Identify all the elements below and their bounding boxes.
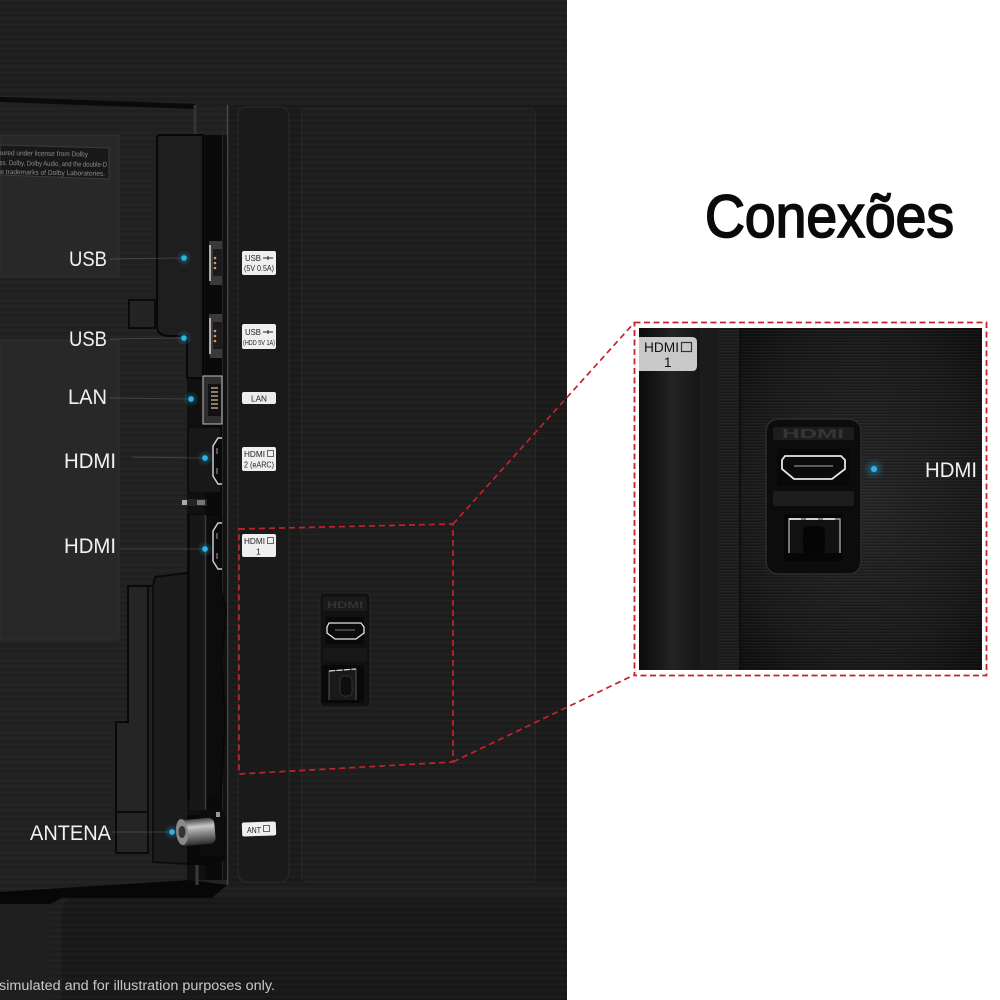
port: antenna connector	[175, 810, 224, 856]
lower cover	[62, 898, 567, 1000]
inset hdmi label: HDMI	[925, 459, 977, 482]
dolby notice plate: re trademarks of Dolby Laboratories.	[0, 169, 105, 178]
tv back panel	[0, 0, 567, 1000]
port tag: ant: ANT	[247, 825, 261, 835]
terminal column	[187, 105, 227, 885]
inset hdmi port	[782, 456, 845, 479]
label: hdmi 1: HDMI	[64, 535, 116, 558]
recessed terminal area	[0, 102, 227, 892]
port: hdmi 2	[213, 438, 222, 484]
inset hdmi tag	[639, 337, 697, 371]
inset left strip	[639, 328, 700, 670]
inset hdmi tag: HDMI	[644, 340, 679, 355]
port: hdmi 1	[213, 523, 222, 569]
inset marker	[863, 458, 885, 480]
inset textured surface	[741, 328, 982, 670]
port: usb 2	[209, 314, 222, 358]
port tag: hdmi 2	[242, 447, 276, 471]
port tag: hdmi 1: 1	[256, 546, 261, 556]
blue dot markers	[164, 250, 213, 840]
port tag: usb hdd: (HDD 5V 1A)	[243, 338, 275, 347]
label: lan: LAN	[68, 386, 107, 409]
hdmi door 1	[188, 515, 226, 810]
white side panel	[567, 0, 1000, 1000]
port tag: ant	[242, 821, 276, 837]
port: lan	[203, 376, 222, 424]
port tag: hdmi 2: 2 (eARC)	[244, 460, 274, 470]
dolby notice plate: ies. Dolby, Dolby Audio, and the double-D	[0, 160, 107, 169]
dolby notice plate: oured under license from Dolby	[0, 150, 89, 159]
label: usb 1: USB	[69, 248, 107, 271]
inset port housing: HDMI	[782, 426, 844, 441]
port tag: hdmi 2: HDMI	[244, 449, 265, 459]
inset hdmi tag: 1	[664, 355, 672, 370]
antenna recess	[187, 815, 225, 865]
leader lines	[110, 258, 201, 832]
rating panel lower	[0, 340, 119, 640]
port tag: usb hdd: USB	[245, 327, 261, 337]
port tag: usb hdd	[242, 324, 276, 349]
title: Conexões	[705, 183, 954, 250]
dolby notice plate	[0, 145, 109, 179]
blank cover panel	[302, 108, 536, 882]
small port housing: HDMI	[327, 600, 363, 610]
port tag: lan: LAN	[251, 394, 267, 404]
hinge	[181, 499, 207, 506]
label: usb 2: USB	[69, 328, 107, 351]
inset port housing	[766, 419, 861, 574]
port tag: hdmi 1	[242, 534, 276, 557]
inset optical port	[789, 519, 840, 553]
hdmi door 2	[188, 427, 221, 493]
inset panel	[639, 328, 982, 670]
usb door	[157, 135, 203, 378]
port: usb 1	[209, 241, 222, 285]
small square clip	[129, 300, 155, 328]
label: hdmi 2: HDMI	[64, 450, 116, 473]
port tag: usb 5v	[242, 251, 276, 275]
port tag: lan	[242, 392, 276, 404]
port tag: usb 5v: (5V 0.5A)	[244, 263, 274, 273]
lower stepped structure	[116, 573, 187, 864]
inset dashed frame	[634, 322, 986, 676]
caption: simulated and for illustration purposes only.	[0, 978, 275, 993]
port tag: hdmi 1: HDMI	[244, 536, 265, 546]
small port housing	[320, 593, 370, 707]
port tag: usb 5v: USB	[245, 253, 261, 263]
zoom callout connector and source box	[239, 323, 634, 774]
label strip panel	[238, 107, 289, 882]
rating panel upper	[0, 135, 119, 277]
label: antena: ANTENA	[30, 822, 111, 845]
